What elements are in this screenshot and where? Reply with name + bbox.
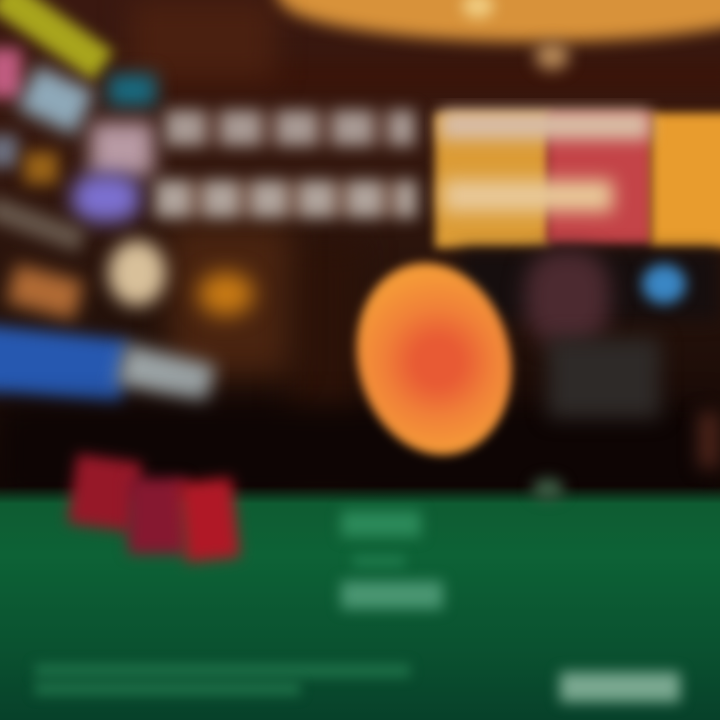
- die: centre: [128, 478, 186, 554]
- block: amber: [435, 113, 550, 248]
- footer upper: [35, 664, 410, 677]
- tile: slate: [0, 135, 18, 167]
- table: green felt: [0, 486, 720, 720]
- tile: pink strip: [0, 48, 22, 98]
- tile: orange: [6, 264, 84, 320]
- icon: blue circle: [642, 264, 686, 304]
- logo: bottom right: [560, 672, 680, 702]
- wall shadow: dark column left of centre: [290, 240, 360, 480]
- ceiling: warm golden arch: [130, 0, 720, 85]
- text: footer line: [32, 660, 412, 700]
- block: orange: [651, 113, 720, 248]
- block text: pale lower line: [443, 180, 613, 212]
- block: red: [547, 113, 652, 245]
- tile: blue banner: [0, 324, 128, 406]
- icons: dark strip right: [460, 250, 720, 320]
- accent: red spot right: [698, 412, 720, 468]
- tile: cream circle: [108, 240, 166, 306]
- background: dark casino interior: [0, 0, 720, 520]
- glow: amber lamp: [198, 272, 254, 316]
- wall: warm brown column: [170, 225, 290, 375]
- heading line one: [165, 110, 415, 146]
- left wall of casino game tiles: [0, 0, 226, 412]
- tile: teal: [108, 74, 156, 106]
- figure: dealer: [525, 250, 610, 345]
- tile: violet: [72, 174, 140, 222]
- text: green table centre lines: [334, 505, 450, 616]
- tile: grey band: [0, 196, 86, 252]
- tile: amber: [24, 152, 58, 184]
- dark lower band: [0, 405, 720, 500]
- line three: [341, 581, 443, 609]
- chip: marker on table: [532, 478, 564, 500]
- panel: colour blocks top right: [426, 98, 720, 256]
- dice: red cluster: [59, 445, 250, 572]
- tile: yellow-green banner: [0, 0, 114, 81]
- die: right: [178, 477, 240, 563]
- line two: [353, 555, 405, 567]
- tile: pale pink: [90, 122, 154, 176]
- line one: [341, 511, 421, 537]
- heading: blurred title: [144, 98, 428, 230]
- tile: pale banner: [116, 343, 216, 407]
- tile: pale blue: [17, 65, 95, 135]
- heading line two: [155, 180, 417, 218]
- die: left: [67, 454, 143, 532]
- panel: grey card: [548, 338, 660, 418]
- footer lower: [35, 682, 300, 695]
- roulette wheel: orange disc: [337, 246, 531, 472]
- block text: pale top line: [440, 110, 650, 140]
